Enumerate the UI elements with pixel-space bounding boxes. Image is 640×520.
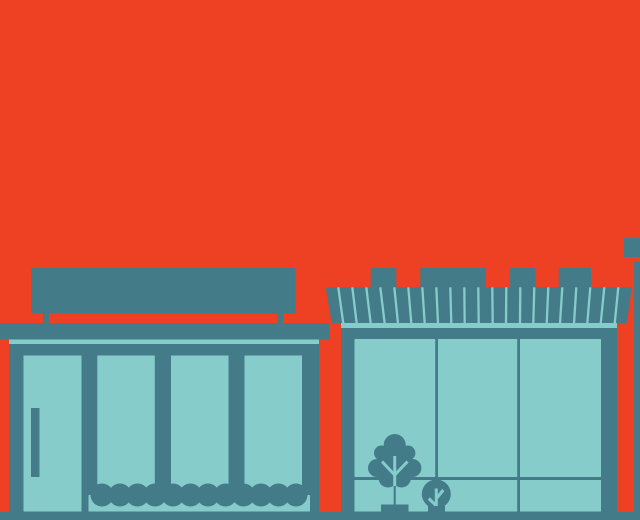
shop windows — [97, 356, 302, 490]
shop wall — [341, 323, 617, 513]
neighbouring building edge — [624, 238, 640, 520]
planter with hedge — [88, 484, 310, 512]
blank sign board — [31, 268, 295, 313]
sign posts — [43, 313, 283, 324]
door handle — [31, 408, 40, 477]
light fascia strip — [9, 340, 319, 344]
left shop — [0, 268, 330, 513]
large window — [354, 339, 601, 512]
icon: round potted shrub — [422, 480, 451, 512]
rooftop blocks — [371, 268, 591, 288]
right shop — [326, 268, 632, 513]
light fascia strip — [341, 323, 617, 328]
pavement — [0, 512, 640, 520]
awning bar — [0, 323, 330, 340]
icon: potted tree — [368, 434, 421, 512]
shop wall — [9, 339, 319, 513]
door — [24, 356, 82, 512]
striped awning — [326, 287, 632, 324]
